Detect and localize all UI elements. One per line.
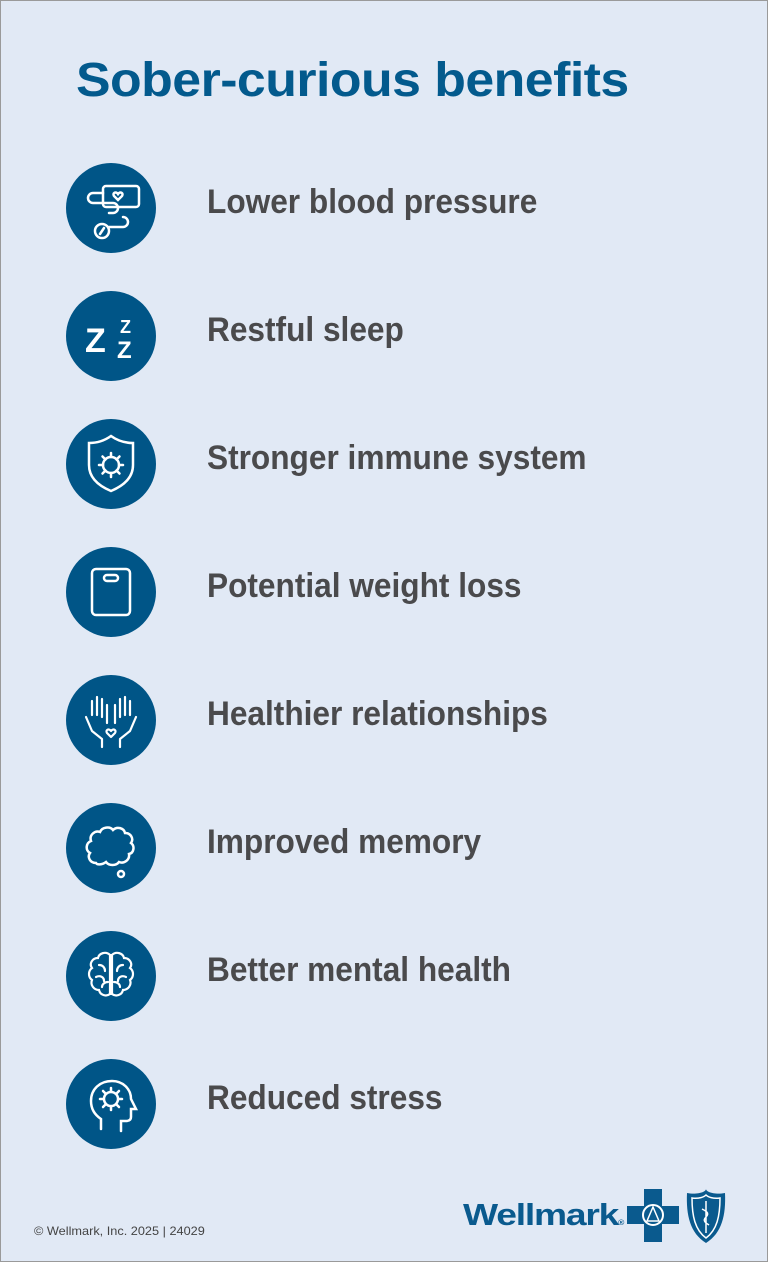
icon: zzz: Z bbox=[117, 337, 132, 364]
logo: Wellmark bbox=[463, 1189, 726, 1243]
row: immune bbox=[66, 419, 587, 509]
icon: shield bbox=[686, 1189, 726, 1243]
row: stress bbox=[66, 1059, 443, 1149]
copyright: © Wellmark, Inc. 2025 | 24029 bbox=[34, 1224, 205, 1238]
icon: thought cloud bbox=[66, 803, 156, 893]
icon: brain bbox=[66, 931, 156, 1021]
logo: Wellmark: Wellmark® bbox=[463, 1197, 623, 1232]
label: Potential weight loss bbox=[207, 567, 521, 605]
icon: zzz bbox=[66, 291, 156, 381]
row: mental bbox=[66, 931, 511, 1021]
icon: shield virus bbox=[66, 419, 156, 509]
label: Lower blood pressure bbox=[207, 183, 537, 221]
label: Healthier relationships bbox=[207, 695, 548, 733]
label: Better mental health bbox=[207, 951, 511, 989]
label: Stronger immune system bbox=[207, 439, 587, 477]
row: lower blood pressure bbox=[66, 163, 537, 253]
icon: zzz: Z bbox=[85, 322, 106, 360]
label: Restful sleep bbox=[207, 311, 404, 349]
icon: hands heart bbox=[66, 675, 156, 765]
row: weight bbox=[66, 547, 521, 637]
row: restful sleep bbox=[66, 291, 404, 381]
icon: blood pressure monitor bbox=[66, 163, 156, 253]
icon: zzz: Z bbox=[120, 317, 131, 337]
row: relationships bbox=[66, 675, 548, 765]
icon: scale bbox=[66, 547, 156, 637]
icon: head with gear bbox=[66, 1059, 156, 1149]
label: Improved memory bbox=[207, 823, 481, 861]
title: Sober-curious benefits bbox=[76, 54, 629, 107]
icon: cross bbox=[627, 1189, 679, 1242]
row: memory bbox=[66, 803, 481, 893]
label: Reduced stress bbox=[207, 1079, 443, 1117]
